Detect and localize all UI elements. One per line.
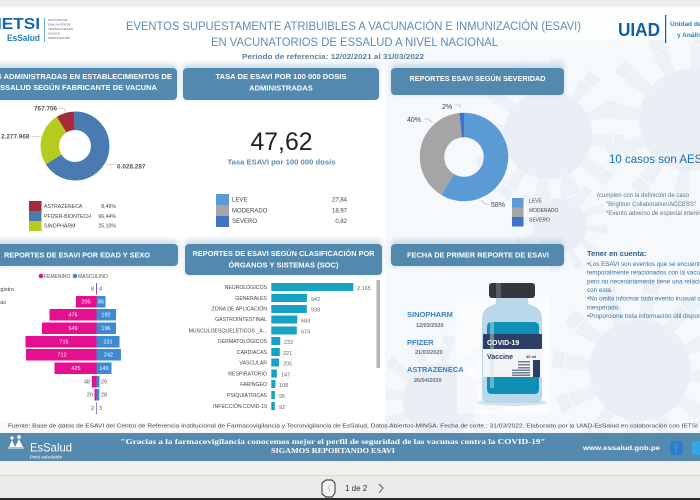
logo: IETSI EsSalud: EsSalud: [7, 33, 40, 44]
legend: manufacturers: ASTRAZENECA: [44, 204, 83, 210]
panel: first report dates: [391, 244, 564, 406]
icon: facebook: [670, 441, 683, 456]
heading: severity: [391, 68, 564, 95]
horizontal bar chart: 95: [279, 394, 285, 400]
horizontal bar chart: GASTROINTESTINAL: [215, 317, 267, 323]
scrollbar: [376, 280, 380, 368]
heading: SOC classification: REPORTES DE ESAVI SEGÚN CLASIFICACIÓN POR: [192, 249, 375, 258]
horizontal bar chart: INFECCIÓN COVID-19: [213, 403, 267, 410]
white left content area: [0, 8, 385, 423]
legend: sex: FEMENINO: [44, 274, 70, 280]
legend: rate by severity: MODERADO: [232, 208, 268, 214]
footer message: "Gracias a la farmacovigilancia conocemos mejor el perfil de seguridad de las vacunas contra la COVID-19": [120, 437, 546, 446]
horizontal bar chart: MUSCULOESQUELÉTICOS _A...: [189, 328, 267, 334]
panel: SOC classification: [185, 244, 382, 411]
icon: vaccine vial: Vaccine: [487, 354, 513, 361]
title: EVENTOS SUPUESTAMENTE ATRIBUIBLES A VACUNACIÓN E INMUNIZACIÓN (ESAVI): [126, 20, 581, 33]
date list: 21/03/2020: [415, 350, 443, 356]
viewer toolbar: [0, 461, 700, 475]
donut labels: 767.706: [34, 106, 58, 112]
callout: AES cases: [597, 154, 700, 217]
logo: UIAD: [618, 15, 700, 43]
pyramid chart: 48: [84, 380, 90, 386]
heading: first report dates: [391, 244, 564, 266]
horizontal bar chart: 221: [283, 351, 292, 357]
logo: IETSI EsSalud: INVESTIGACIÓN: [48, 35, 70, 40]
browser top strip: [0, 0, 700, 6]
source note: Fuente: Base de datos de ESAVI del Centro de Referencia Institucional de Farmacovigilancia y Tecnovigilancia de EsSalud, Datos Abiertos-MINSA. Fecha de corte : 31/03/2022. Elaborado por la UIAD-EsSalud en colaboración con IETSI: [8, 424, 699, 430]
heading: ESAVI rate: ADMINISTRADAS: [249, 84, 313, 92]
legend: rate by severity: SEVERO: [232, 219, 257, 225]
pyramid chart: 3: [99, 406, 102, 412]
note: keep in mind: Tener en cuenta:: [587, 249, 646, 258]
icon: vaccine vial: COVID-19: [487, 340, 519, 347]
reference period: Periodo de referencia: 12/02/2021 al 31/03/2022: [242, 52, 424, 61]
panel: severity: [391, 68, 564, 226]
horizontal bar chart: 147: [281, 372, 290, 378]
horizontal bar chart: 2.165: [357, 286, 371, 292]
donut chart: manufacturers: [50, 121, 100, 171]
icon: twitter: [692, 441, 700, 455]
pyramid chart: 712: [57, 352, 67, 358]
horizontal bar chart: [189, 283, 371, 411]
heading: doses by manufacturer: [0, 68, 177, 100]
pyramid chart: 425: [71, 366, 81, 372]
heading: ESAVI rate: [183, 68, 379, 100]
callout: AES cases: "Brighton Collaboration/ACCESS": [606, 202, 696, 208]
icon: facebook: f: [674, 442, 679, 456]
logo: EsSalud footer: EsSalud: [30, 440, 72, 454]
horizontal bar chart: DERMATOLÓGICOS: [218, 338, 268, 345]
legend: manufacturers: [29, 201, 116, 231]
pyramid chart: 476: [68, 312, 78, 318]
donut labels: severity: [407, 104, 505, 209]
pyramid chart: 549: [68, 326, 78, 332]
pyramid chart: 149: [99, 366, 109, 372]
footer banner: [0, 433, 700, 461]
website: www.essalud.gob.pe: [582, 445, 660, 452]
panel: ESAVI rate: [183, 68, 379, 227]
footer message: [120, 437, 546, 455]
donut labels: 2.277.968: [1, 134, 30, 140]
pager: [322, 480, 383, 497]
heading: SOC classification: ÓRGANOS Y SISTEMAS (SOC): [228, 260, 339, 270]
horizontal bar chart: 938: [311, 308, 320, 314]
logo: IETSI EsSalud: INSTITUTO DE: [48, 18, 68, 22]
callout: AES cases: (cumplen con la definición de caso: [597, 193, 690, 199]
legend: sex: [39, 274, 108, 280]
pyramid chart: 205: [81, 300, 91, 306]
callout: AES cases: *Evento adverso de especial interés: [606, 211, 700, 217]
logo: EsSalud footer: [8, 435, 72, 460]
pager: 1 de 2: [345, 484, 368, 493]
logo: IETSI EsSalud: SALUD E: [48, 32, 60, 36]
heading: age and sex: [0, 244, 178, 266]
pyramid chart: 231: [103, 340, 113, 346]
logo: UIAD: UIAD: [618, 20, 660, 40]
legend: rate by severity: LEVE: [232, 198, 247, 204]
date list: SINOPHARM: [407, 310, 453, 319]
legend: severity: SEVERO: [529, 218, 550, 224]
note: keep in mind: •No omita informar todo evento inusual o: [587, 296, 700, 302]
icon: vaccine vial: [477, 283, 547, 406]
background virus pattern: [380, 38, 700, 460]
pyramid chart: 29: [101, 380, 107, 386]
donut chart: severity: [432, 125, 496, 189]
horizontal bar chart: 92: [279, 405, 285, 411]
heading: first report dates: FECHA DE PRIMER REPORTE DE ESAVI: [407, 250, 549, 260]
vial backdrop: [457, 296, 550, 414]
logo: IETSI EsSalud: EVALUACIÓN DE: [48, 22, 71, 26]
pyramid chart: 192: [101, 312, 111, 318]
horizontal bar chart: CARDIACAS: [237, 350, 268, 356]
legend: severity: MODERADO: [529, 208, 559, 214]
horizontal bar chart: 232: [284, 340, 293, 346]
legend: manufacturers: SINOPHARM: [44, 224, 75, 230]
logo: EsSalud footer: Perú saludable: [30, 454, 63, 460]
horizontal bar chart: 684: [301, 318, 310, 324]
horizontal bar chart: GENERALES: [235, 296, 268, 302]
donut labels: severity: 40%: [407, 117, 421, 124]
legend: manufacturers: PFIZER-BIONTECH: [44, 214, 91, 220]
date list: 26/04/2020: [414, 378, 442, 384]
legend: severity: LEVE: [529, 198, 542, 204]
donut labels: severity: 2%: [442, 104, 452, 111]
horizontal bar chart: PSIQUIÁTRICAS: [227, 392, 268, 399]
horizontal bar chart: 205: [283, 362, 292, 368]
horizontal bar chart: 674: [301, 330, 310, 336]
donut labels: 6.028.287: [117, 164, 146, 170]
pyramid chart: 242: [104, 352, 113, 358]
title: EN VACUNATORIOS DE ESSALUD A NIVEL NACIONAL: [211, 37, 499, 49]
pyramid chart: 2: [91, 406, 94, 412]
pyramid chart: 8: [91, 286, 94, 292]
pyramid chart: 85: [98, 300, 104, 306]
title: [126, 20, 581, 49]
legend: rate by severity: 27,84: [332, 198, 348, 204]
legend: rate by severity: [216, 194, 348, 227]
logo: IETSI EsSalud: [0, 16, 73, 44]
rate caption: Tasa ESAVI por 100 000 dosis: [228, 160, 336, 166]
donut labels: [1, 106, 146, 170]
pyramid chart: 715: [59, 340, 69, 346]
heading: SOC classification: [185, 244, 382, 275]
header glow: [0, 64, 564, 274]
pyramid chart: 196: [101, 326, 111, 332]
horizontal bar chart: ZONA DE APLICACIÓN: [212, 306, 267, 312]
date list: [407, 310, 464, 384]
note: keep in mind: inesperado.: [587, 304, 620, 312]
icon: vaccine vial: 30 ml: [526, 354, 536, 359]
heading: age and sex: REPORTES DE ESAVI POR EDAD Y SEXO: [4, 250, 150, 260]
legend: manufacturers: 66,44%: [98, 214, 116, 220]
pyramid chart: [26, 283, 121, 414]
heading: ESAVI rate: TASA DE ESAVI POR 100 000 DOSIS: [216, 72, 346, 81]
legend: severity: [512, 198, 559, 226]
horizontal bar chart: NEUROLÓGICOS: [225, 284, 268, 291]
date list: PFIZER: [407, 338, 434, 347]
logo: IETSI EsSalud: TECNOLOGÍAS EN: [48, 27, 73, 31]
legend: rate by severity: 0,82: [335, 219, 348, 225]
donut labels: severity: 58%: [491, 202, 505, 209]
horizontal bar chart: 108: [279, 383, 288, 389]
horizontal bar chart: 942: [311, 297, 320, 303]
horizontal bar chart: VASCULAR: [239, 360, 267, 366]
pyramid chart: 4: [99, 286, 102, 292]
note: keep in mind: con esta.: [587, 287, 613, 294]
legend: manufacturers: 8,46%: [101, 204, 116, 210]
date list: 12/02/2020: [416, 323, 444, 329]
pyramid chart: 28: [101, 392, 107, 398]
rate number: 47,62: [250, 128, 312, 156]
date list: ASTRAZENECA: [407, 365, 464, 374]
legend: sex: MASCULINO: [78, 274, 108, 280]
legend: manufacturers: 25,10%: [98, 224, 116, 230]
pyramid chart: 20: [87, 392, 93, 398]
panel: doses by manufacturer: [0, 68, 177, 231]
panel: age and sex: [0, 244, 178, 414]
legend: rate by severity: 18,97: [332, 208, 348, 214]
note: keep in mind: [587, 249, 700, 320]
horizontal bar chart: RESPIRATORIO: [228, 372, 267, 378]
age labels: [0, 287, 14, 306]
horizontal bar chart: FARINGEO: [240, 382, 267, 388]
footer message: SIGAMOS REPORTANDO ESAVI: [271, 447, 395, 455]
heading: severity: REPORTES ESAVI SEGÚN SEVERIDAD: [410, 74, 546, 83]
